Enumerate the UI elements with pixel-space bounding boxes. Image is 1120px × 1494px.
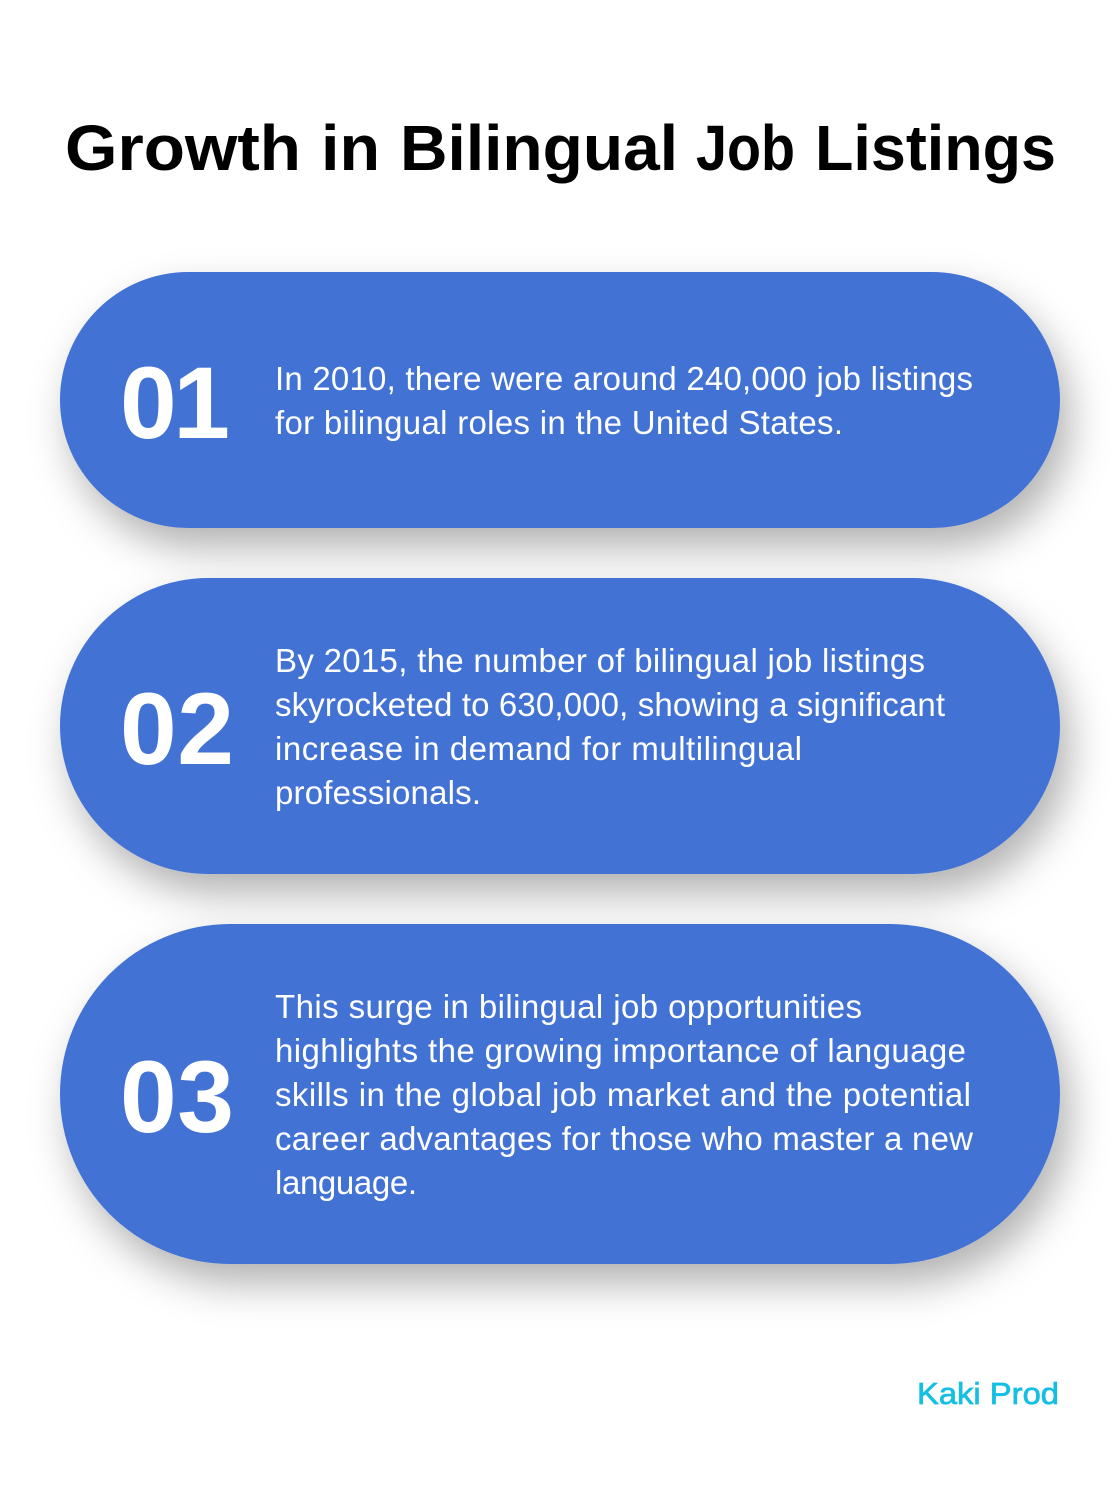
- text block 03: skills in the global job market and the potential: [275, 1076, 971, 1113]
- title: [65, 112, 1056, 184]
- logo: Kaki Prod: Kaki Prod: [917, 1376, 1059, 1411]
- card background 01: [60, 272, 1060, 528]
- title: Growth: [65, 112, 301, 184]
- text block 01: In 2010, there were around 240,000 job listings: [275, 360, 973, 397]
- text block 02: skyrocketed to 630,000, showing a significant: [275, 686, 945, 723]
- text block 03: highlights the growing importance of language: [275, 1032, 966, 1069]
- number 03: 03: [120, 1040, 234, 1154]
- text block 02: By 2015, the number of bilingual job listings: [275, 642, 925, 679]
- card background 02: [60, 578, 1060, 874]
- title: Job: [696, 112, 795, 184]
- panel: step 02: [60, 578, 1060, 874]
- text block 01: [275, 360, 973, 441]
- text block 02: professionals.: [275, 774, 481, 811]
- text block 02: [275, 642, 945, 811]
- text block 03: This surge in bilingual job opportunities: [275, 988, 862, 1025]
- title: Bilingual: [400, 112, 678, 184]
- text block 03: career advantages for those who master a new: [275, 1120, 973, 1157]
- number 02: 02: [120, 672, 234, 786]
- panel: step 03: [60, 924, 1060, 1264]
- title: Listings: [815, 112, 1056, 184]
- number 01: 01: [120, 346, 230, 460]
- text block 02: increase in demand for multilingual: [275, 730, 802, 767]
- text block 03: language.: [275, 1164, 417, 1201]
- title: in: [321, 112, 380, 184]
- card background 03: [60, 924, 1060, 1264]
- panel: step 01: [60, 272, 1060, 528]
- text block 03: [275, 988, 973, 1201]
- text block 01: for bilingual roles in the United States.: [275, 404, 843, 441]
